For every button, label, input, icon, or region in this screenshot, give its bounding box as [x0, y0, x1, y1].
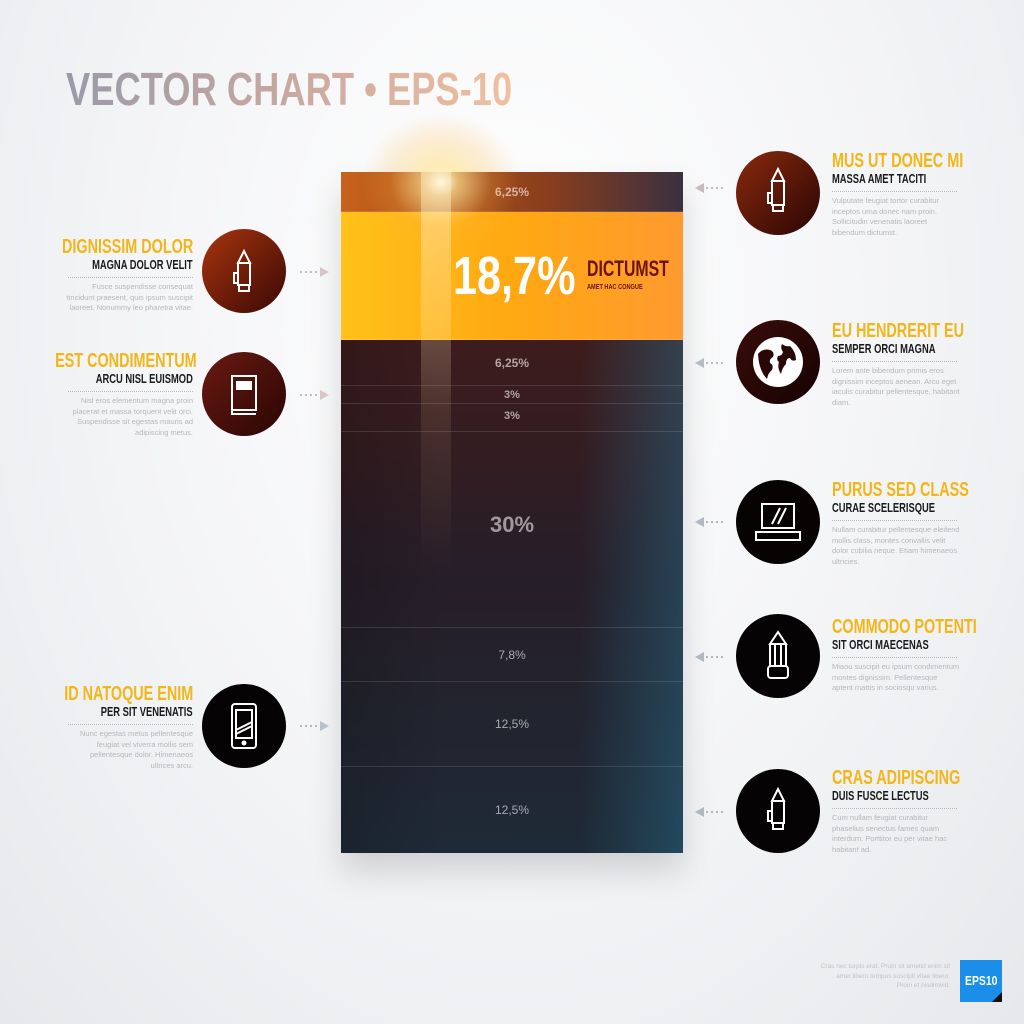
title: VECTOR CHART • EPS-10: [66, 63, 512, 115]
icon: pencil: [736, 614, 820, 698]
segment 6.25% top: [341, 172, 683, 212]
right item 5: Cum nullam feugiat curabitur phasellus senectus fames quam interdum. Porttitor eu per vitae hac habitant ad.: [832, 813, 947, 854]
left item 1: DIGNISSIM DOLOR: [62, 236, 193, 258]
left item 1: Fusce suspendisse consequat tincidunt praesent, quis ipsum suscipit laoreet. Nonummy leo pharetra vitae.: [67, 282, 193, 312]
arrow left 2: [300, 390, 329, 400]
arrow right 5: [695, 807, 723, 817]
segment 6.25%: 6,25%: [495, 356, 529, 370]
arrow right 3: [695, 517, 723, 527]
stacked bar chart: [341, 172, 683, 853]
arrow right 1: [695, 183, 723, 193]
right item 4: SIT ORCI MAECENAS: [832, 637, 929, 652]
segment 6.25%: [341, 340, 683, 386]
arrow right 2: [695, 358, 723, 368]
segment 3%: 3%: [504, 389, 520, 401]
right item 1: MUS UT DONEC MI: [832, 150, 963, 172]
segment 12.5%: 12,5%: [495, 717, 529, 731]
right item 3: [832, 479, 969, 566]
right item 3: Nullam curabitur pellentesque eleifend mollis class, montes convallis velit dolor cubilia neque. Etiam himenaeos ultricies.: [832, 525, 960, 566]
left item 3: PER SIT VENENATIS: [101, 704, 193, 719]
right item 4: COMMODO POTENTI: [832, 616, 977, 638]
right item 2: [832, 320, 964, 406]
icon: book: [202, 352, 286, 436]
left item 3: [64, 683, 193, 770]
right item 1: MASSA AMET TACITI: [832, 171, 926, 186]
arrow right 4: [695, 652, 723, 662]
segment 18.7% highlight: AMET HAC CONGUE: [587, 284, 643, 291]
right item 3: PURUS SED CLASS: [832, 479, 969, 501]
right item 5: DUIS FUSCE LECTUS: [832, 788, 929, 803]
right item 2: SEMPER ORCI MAGNA: [832, 341, 935, 356]
segment 30%: 30%: [490, 512, 534, 537]
left item 2: EST CONDIMENTUM: [55, 350, 197, 372]
arrow left 3: [300, 721, 329, 731]
icon: laptop: [736, 480, 820, 564]
left item 3: Nunc egestas metus pellentesque feugiat vel viverra mollis sem pellentesque dolor. Himenaeos ultrices arcu.: [80, 729, 193, 770]
badge: EPS10: EPS10: [965, 973, 997, 988]
segment 7.8%: 7,8%: [498, 648, 526, 662]
segment 30%: [341, 432, 683, 628]
segment 12.5% bottom: 12,5%: [495, 803, 529, 817]
left item 2: Nisl eros elementum magna proin placerat et massa torquent velit orci. Suspendisse sit egestas mauris ad adipiscing metus.: [73, 396, 193, 436]
footer note: Cras nec turpis erat. Proin sit ametid enim sit amet libero tempus suscipit vitae libero. Proin et nisdimvid.: [821, 963, 950, 989]
right item 1: Vulputate feugiat tortor curabitur inceptos urna donec nam proin. Sollicitudin venenatis laoreet bibendum dictumst.: [832, 196, 939, 236]
icon: phone: [202, 684, 286, 768]
segment 3%: [341, 386, 683, 404]
segment 7.8%: [341, 628, 683, 682]
icon: globe: [736, 320, 820, 404]
right item 4: [832, 616, 977, 692]
sun flare: [361, 112, 521, 252]
icon: rocket right 5: [736, 769, 820, 853]
left item 2: ARCU NISL EUISMOD: [96, 371, 193, 386]
right item 4: Miaou suscipit eu ipsum condimentum montes dignissim. Pellentesque aptent mattis in sociosqu varius.: [832, 662, 959, 692]
right item 1: [832, 150, 963, 236]
segment 6.25% top: 6,25%: [495, 185, 529, 199]
segment 3% second: [341, 404, 683, 432]
icon: rocket right 1: [736, 151, 820, 235]
segment 18.7% highlight: 18,7%: [453, 246, 576, 306]
left item 1: MAGNA DOLOR VELIT: [92, 257, 193, 272]
segment 18.7% highlight: [341, 212, 683, 340]
right item 5: CRAS ADIPISCING: [832, 767, 960, 789]
right item 2: Lorem ante bibendum primis eros dignissim inceptos aenean. Arcu eget iaculis curabitur pellentesque, habitant diam.: [832, 366, 960, 406]
badge: EPS10: [960, 960, 1002, 1002]
right item 2: EU HENDRERIT EU: [832, 320, 964, 342]
segment 12.5%: [341, 682, 683, 767]
icon: rocket left 1: [202, 229, 286, 313]
left item 2: [55, 350, 197, 436]
right item 5: [832, 767, 960, 854]
segment 3% second: 3%: [504, 410, 520, 422]
left item 1: [62, 236, 193, 312]
right item 3: CURAE SCELERISQUE: [832, 500, 935, 515]
segment 18.7% highlight: DICTUMST: [587, 256, 669, 281]
arrow left 1: [300, 267, 329, 277]
left item 3: ID NATOQUE ENIM: [64, 683, 193, 705]
